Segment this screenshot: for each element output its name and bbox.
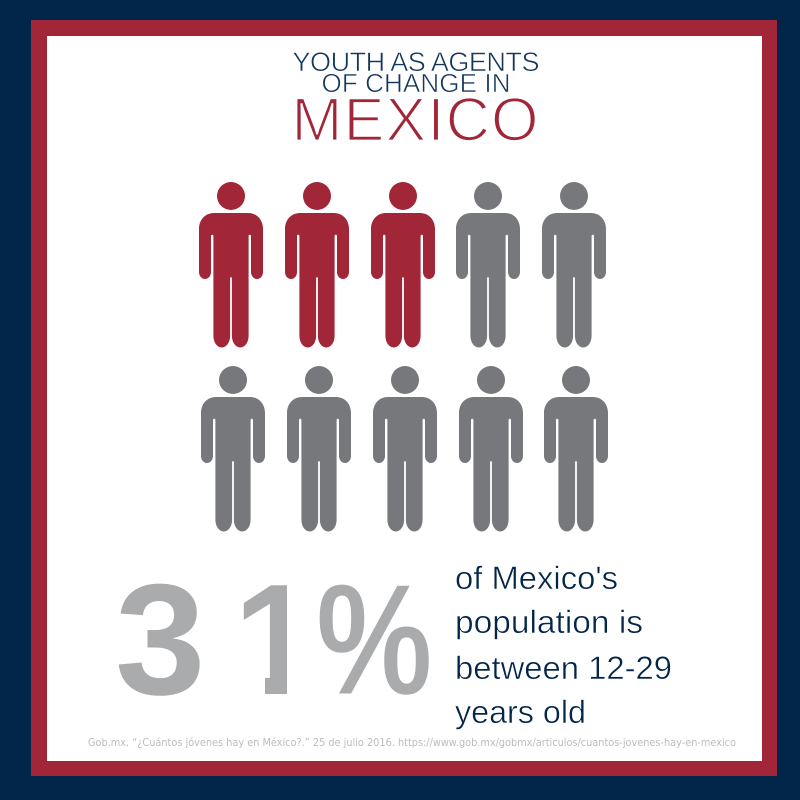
big statistic: 3 [115,551,206,727]
source citation: Gob.mx. “¿Cuántos jóvenes hay en México?.” 25 de julio 2016. https://www.gob.mx/gobmx/articulos/cuantos-jovenes-hay-en-mexico [88,736,736,749]
statistic description [455,560,672,730]
big statistic: % [316,551,433,728]
title [292,47,540,154]
title: YOUTH AS AGENTS [292,47,540,77]
statistic description: between 12-29 [455,650,672,686]
big statistic [118,584,429,696]
pictogram: 3 of 10 people highlighted [199,182,608,532]
big statistic: 1 [233,552,321,728]
title: MEXICO [292,86,538,154]
statistic description: population is [455,604,643,640]
title: OF CHANGE IN [322,68,510,98]
statistic description: years old [455,694,586,730]
statistic description: of Mexico's [455,560,618,596]
